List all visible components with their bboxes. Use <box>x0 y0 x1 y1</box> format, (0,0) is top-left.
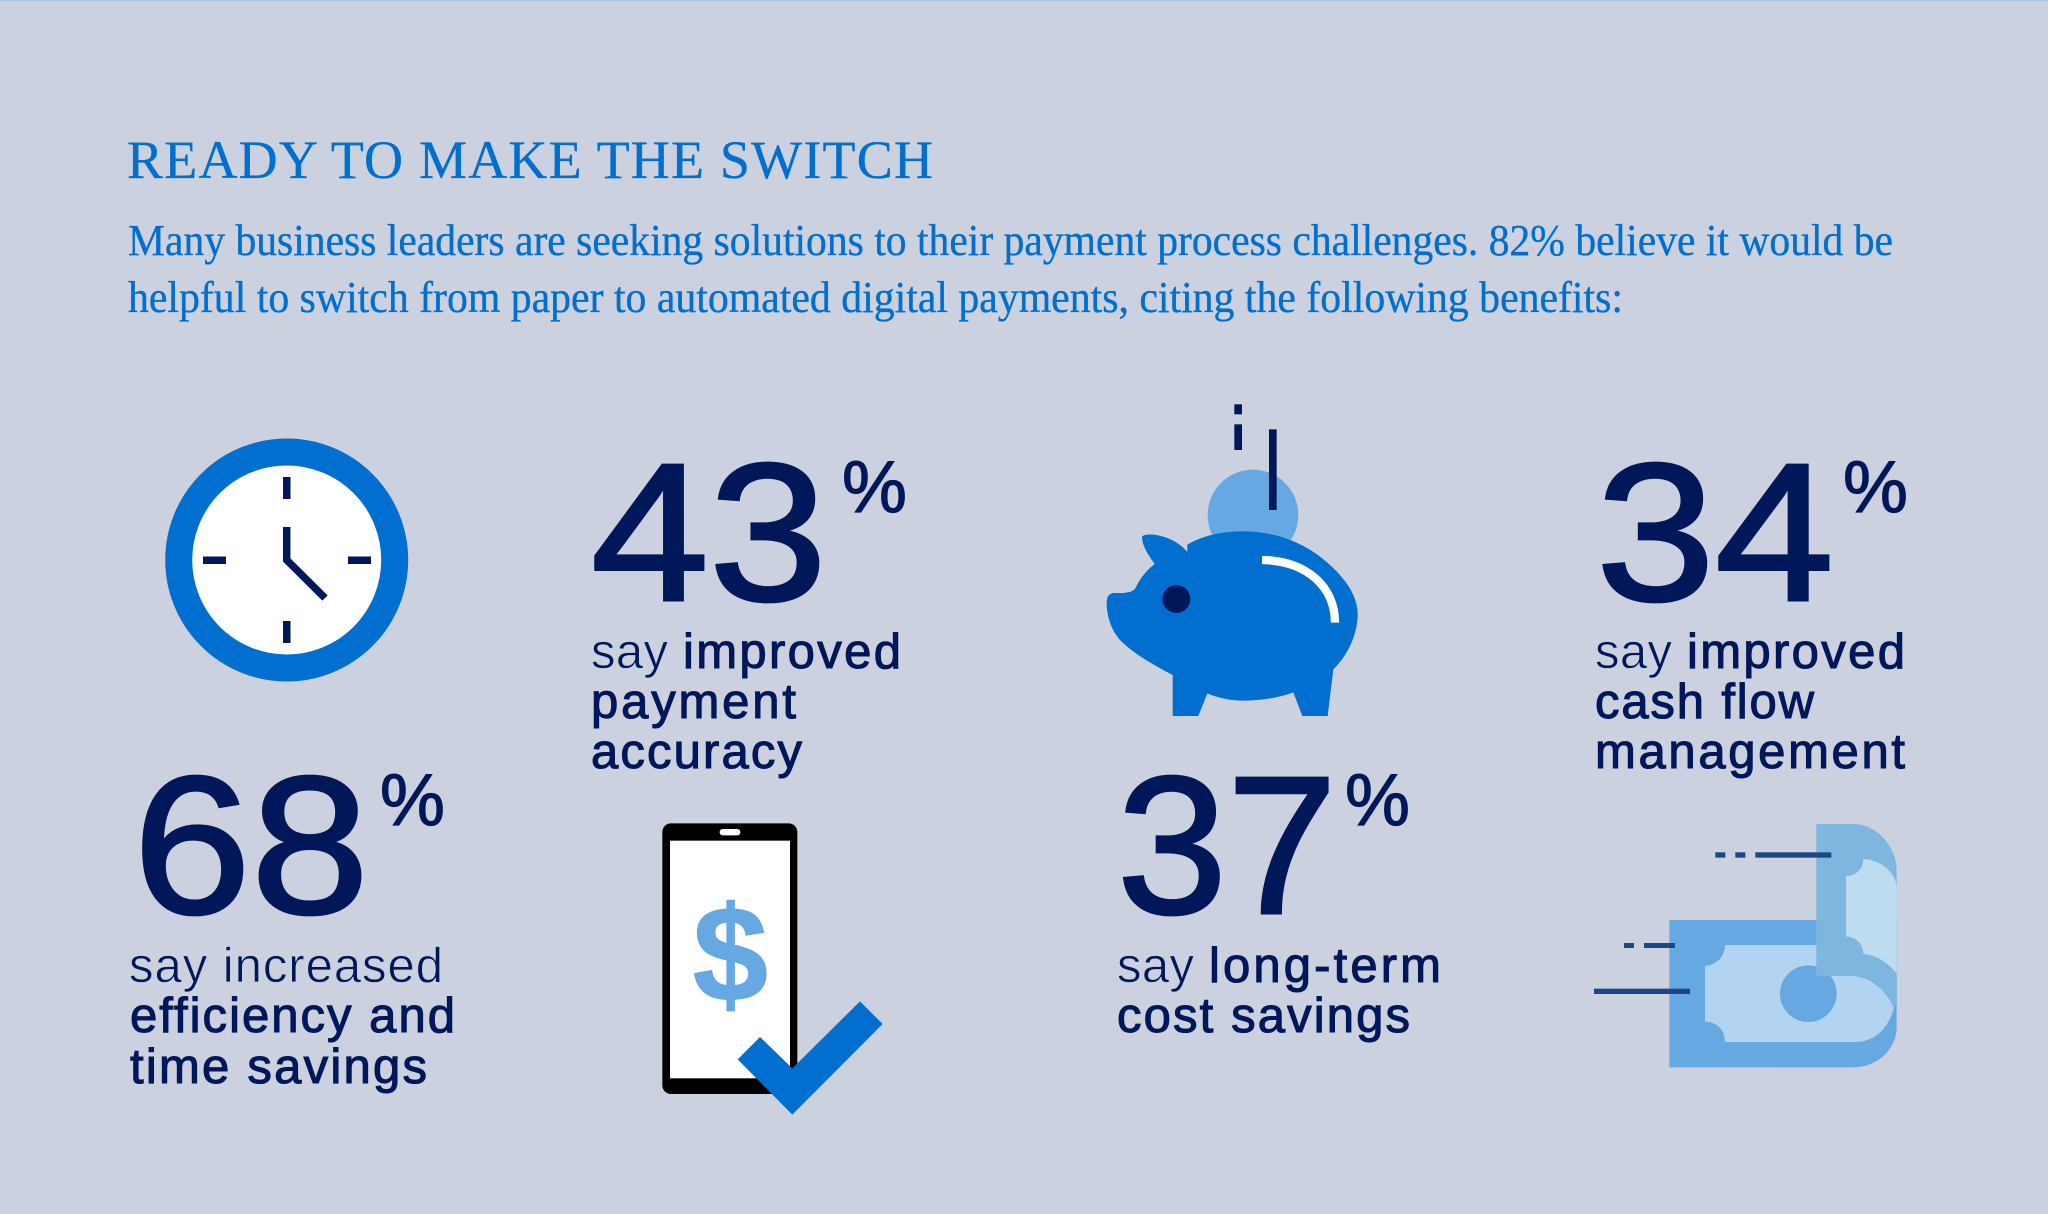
stat: 37% long-term cost savings: % <box>1345 760 1410 841</box>
stat: 43% payment accuracy: payment <box>591 675 796 729</box>
icon: folded banknote in motion <box>1594 824 1897 1067</box>
icon: clock <box>179 452 395 668</box>
stat: 68% efficiency and time savings <box>129 736 455 1094</box>
stat: 43% payment accuracy <box>591 423 907 779</box>
intro paragraph <box>128 216 1893 322</box>
icon: smartphone with dollar and check mark <box>662 823 883 1115</box>
stat: 37% long-term cost savings: cost savings <box>1117 989 1410 1043</box>
stat: 43% payment accuracy: say <box>591 625 668 679</box>
stat: 34% cash flow management: management <box>1595 725 1905 779</box>
stat: 68% efficiency and time savings: % <box>380 760 445 841</box>
stat: 43% payment accuracy: % <box>842 447 907 528</box>
stat: 34% cash flow management: cash flow <box>1595 675 1815 729</box>
stat: 34% cash flow management: say <box>1595 625 1672 679</box>
stat: 68% efficiency and time savings: 68 <box>133 736 369 955</box>
stat: 37% long-term cost savings <box>1117 736 1441 1043</box>
stat: 37% long-term cost savings: long-term <box>1209 939 1441 993</box>
icon: piggy bank with coin <box>1107 404 1358 716</box>
stat: 37% long-term cost savings: say <box>1117 939 1194 993</box>
stat: 34% cash flow management: % <box>1843 447 1908 528</box>
stat: 43% payment accuracy: accuracy <box>591 725 802 779</box>
stat: 43% payment accuracy: 43 <box>591 423 827 642</box>
stat: 34% cash flow management: improved <box>1687 625 1905 679</box>
intro paragraph: helpful to switch from paper to automated digital payments, citing the following benefits: <box>128 273 1623 322</box>
intro paragraph: Many business leaders are seeking solutions to their payment process challenges. 82% believe it would be <box>128 216 1893 265</box>
stat: 68% efficiency and time savings: time savings <box>130 1040 427 1094</box>
icon: smartphone with dollar and check mark: $ <box>693 879 768 1030</box>
stat: 34% cash flow management <box>1595 423 1908 779</box>
stat: 68% efficiency and time savings: say increased <box>129 939 443 993</box>
stat: 37% long-term cost savings: 37 <box>1117 736 1337 955</box>
stat: 34% cash flow management: 34 <box>1596 423 1834 642</box>
stat: 68% efficiency and time savings: efficiency and <box>130 989 455 1043</box>
title: READY TO MAKE THE SWITCH <box>127 130 933 190</box>
stat: 43% payment accuracy: improved <box>683 625 901 679</box>
